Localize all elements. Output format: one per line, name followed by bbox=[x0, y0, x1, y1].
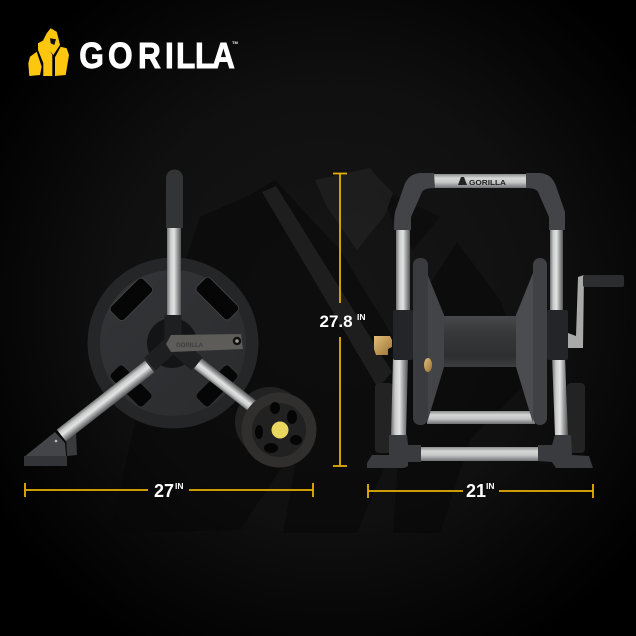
dimension: depth 27 in: 27 bbox=[154, 481, 174, 501]
trademark: TM bbox=[232, 40, 238, 45]
top handle bar bbox=[394, 173, 565, 230]
lower frame tubes bbox=[391, 356, 568, 436]
hub sockets bbox=[150, 315, 197, 364]
left leg bbox=[24, 361, 154, 466]
top handle bbox=[166, 170, 183, 316]
dimension: height 27.8 in: 27.8 bbox=[320, 312, 353, 331]
crank arm: GORILLA bbox=[176, 343, 204, 349]
crank arm bbox=[166, 334, 243, 352]
dimension: depth 27 in: IN bbox=[175, 481, 184, 491]
right leg and wheel bbox=[194, 358, 316, 468]
reel spool bbox=[413, 258, 547, 425]
side view reel bbox=[24, 170, 316, 468]
dimension: width 21 in bbox=[368, 481, 593, 501]
dimension: width 21 in: IN bbox=[486, 481, 494, 491]
logo wordmark: GORILLA bbox=[79, 36, 235, 76]
bearing clamps bbox=[393, 310, 568, 360]
dimension: width 21 in: 21 bbox=[466, 481, 486, 501]
dimension: depth 27 in bbox=[25, 481, 313, 501]
back cross bar bbox=[427, 411, 535, 424]
upper frame tubes bbox=[396, 226, 563, 312]
reel disc bbox=[88, 258, 258, 428]
front cross bar bbox=[420, 447, 539, 461]
front view reel bbox=[367, 173, 624, 468]
dimension: height 27.8 in bbox=[320, 173, 366, 466]
icon: gorilla bbox=[28, 28, 69, 76]
logo bbox=[28, 28, 238, 76]
feet bbox=[367, 435, 593, 468]
watermark gorilla bbox=[110, 168, 530, 533]
crank handle bbox=[568, 275, 624, 348]
dimension: height 27.8 in: IN bbox=[357, 312, 366, 322]
top handle bar: GORILLA bbox=[469, 178, 507, 187]
wheels bbox=[375, 383, 585, 453]
brass fittings bbox=[374, 336, 432, 372]
